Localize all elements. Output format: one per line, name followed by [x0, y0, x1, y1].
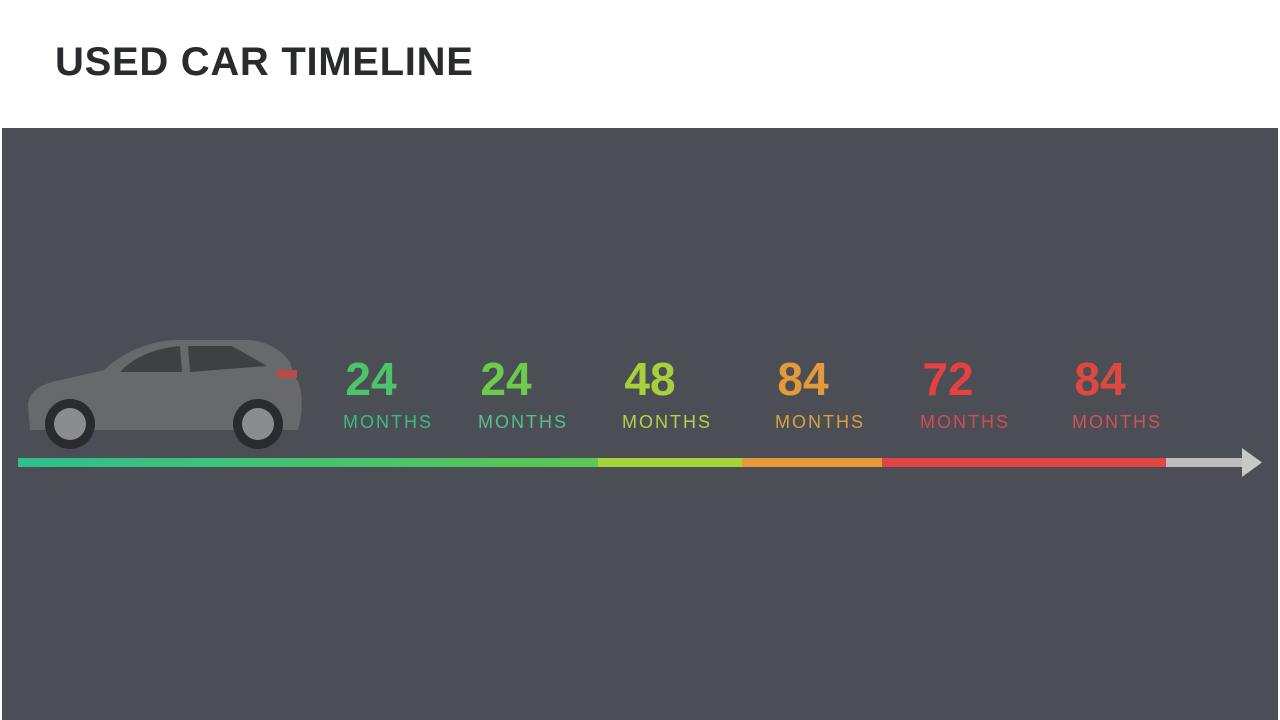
label: 72 months: 72: [922, 353, 974, 405]
label: 84 months: 84: [777, 353, 829, 405]
title: USED CAR TIMELINE: [55, 40, 474, 84]
label: 84 months: [775, 353, 865, 432]
label: 72 months: [920, 353, 1010, 432]
label: 84 months: MONTHS: [775, 412, 865, 432]
label: 48 months: MONTHS: [622, 412, 712, 432]
label: 24 months (2): 24: [480, 353, 532, 405]
label: 48 months: 48: [624, 353, 676, 405]
label: 24 months (2): [478, 353, 568, 432]
label: 84 months (2): [1072, 353, 1162, 432]
label: 24 months: [343, 353, 433, 432]
arrow: timeline bar: [18, 448, 1262, 477]
header: [0, 0, 1280, 128]
label: 72 months: MONTHS: [920, 412, 1010, 432]
label: 84 months (2): MONTHS: [1072, 412, 1162, 432]
label: 24 months (2): MONTHS: [478, 412, 568, 432]
label: 24 months: MONTHS: [343, 412, 433, 432]
label: 48 months: [622, 353, 712, 432]
label: 84 months (2): 84: [1074, 353, 1126, 405]
label: 24 months: 24: [345, 353, 397, 405]
icon: car: [28, 340, 302, 449]
